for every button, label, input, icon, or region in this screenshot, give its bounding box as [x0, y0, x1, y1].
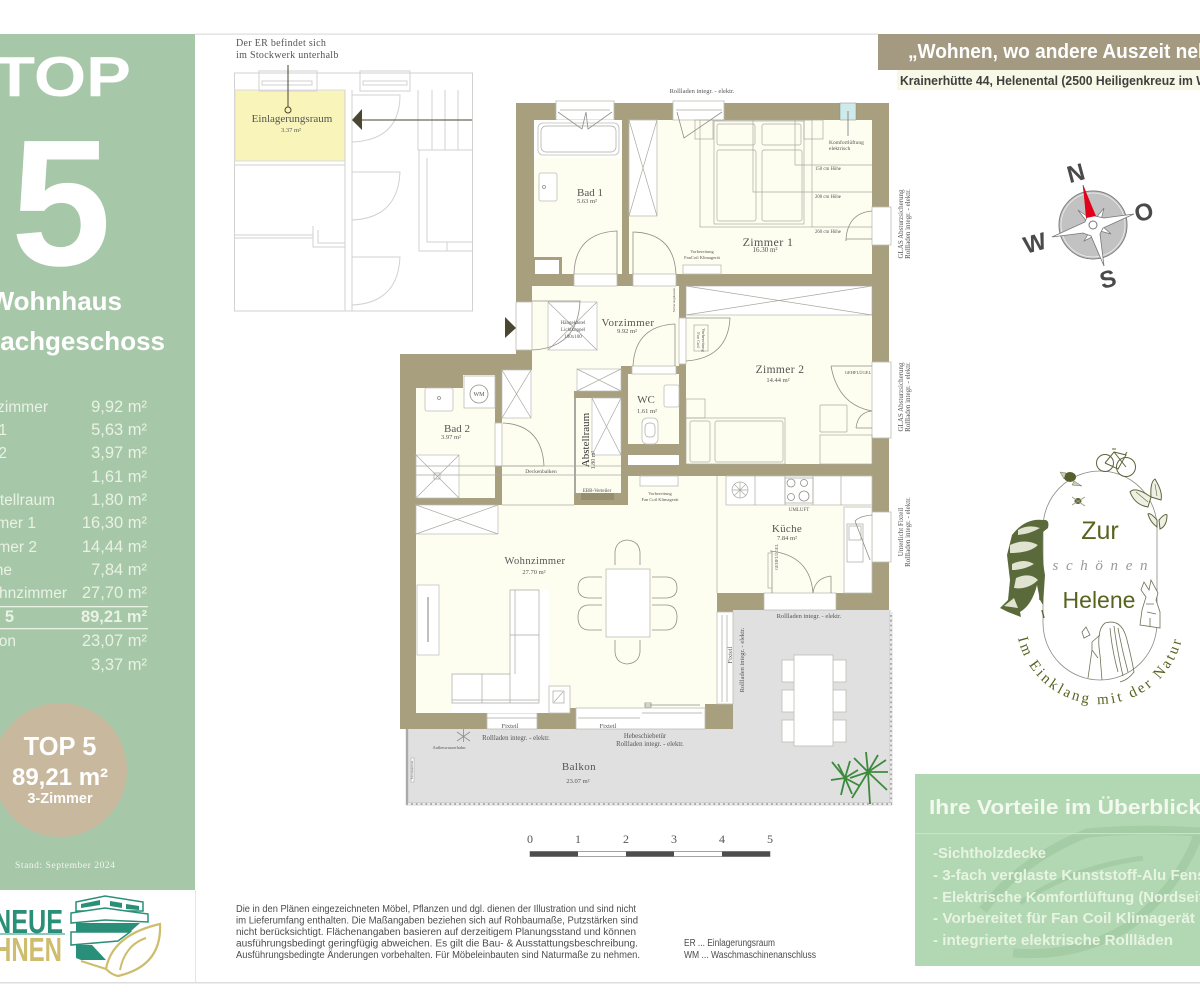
- benefits list: - integrierte elektrische Rollläden: [933, 933, 1173, 949]
- badge: TOP 5 summary circle: [0, 703, 127, 837]
- room interiors: [416, 120, 872, 713]
- room labels: 27.70 m²: [522, 569, 546, 576]
- scale bar: 3: [671, 832, 677, 846]
- room labels: Hebeschiebetür: [624, 733, 667, 740]
- badge: TOP 5 summary circle: 3-Zimmer: [27, 791, 93, 807]
- room labels: elektrisch: [829, 146, 851, 152]
- fan coil box: [640, 476, 678, 486]
- note: ER location: Der ER befindet sich: [236, 38, 326, 49]
- badge: TOP 5 summary circle: TOP 5: [24, 733, 96, 761]
- furniture: Vorzimmer: [502, 301, 675, 418]
- furniture: Bad 1: [534, 112, 622, 274]
- icon: ventilation unit: [840, 103, 856, 136]
- logo: Zur schönen Helene: Im Einklang mit der Natur: [1018, 636, 1181, 706]
- structural lines: [416, 466, 717, 593]
- balcony: Balkon: [562, 761, 596, 773]
- room labels: Vorbereitung: [690, 249, 714, 254]
- room labels: Rollladen integr. - elektr.: [739, 627, 746, 692]
- room labels: Rollladen integr. - elektr.: [777, 613, 842, 620]
- footer disclaimer text: [236, 904, 640, 961]
- footer disclaimer text: Die in den Plänen eingezeichneten Möbel, Pflanzen und dgl. dienen der Illustration und sind nicht: [236, 904, 636, 915]
- benefits list: -Sichtholzdecke: [933, 846, 1046, 862]
- icon: entrance marker: [505, 317, 516, 338]
- room labels: Rollladen integr. - elektr.: [670, 88, 735, 95]
- footer disclaimer text: ausführungsbedingt geringfügig abweichen. Es gilt die Bau- & Ausstattungsbeschreibung.: [236, 938, 638, 950]
- room labels: Wohnzimmer: [505, 556, 566, 567]
- walls: [400, 103, 889, 729]
- scale bar: 2: [623, 832, 629, 846]
- abbreviation legend: WM ... Waschmaschinenanschluss: [684, 950, 816, 961]
- header: slogan bar: [878, 34, 1200, 70]
- panel: storage room plan: [234, 38, 472, 311]
- logo: Zur schönen Helene: Helene: [1063, 587, 1135, 613]
- room area table: 16,30 m²: [82, 514, 147, 532]
- logo: Zur schönen Helene: [1000, 448, 1181, 706]
- room labels: Fan Coil Klimagerät: [642, 497, 679, 502]
- illustration: fox: [1000, 520, 1048, 618]
- room labels: Außenwasserhahn: [432, 745, 466, 750]
- scale bar: 0: [527, 832, 533, 846]
- room labels: 100x100: [564, 335, 582, 340]
- room area table: 89,21 m²: [81, 608, 147, 626]
- room area table: 27,70 m²: [82, 584, 147, 602]
- furniture: Bad 2: WM: [474, 392, 485, 398]
- logo: Zur schönen Helene: schönen: [1052, 558, 1148, 574]
- room: Einlagerungsraum: 3.37 m²: [281, 127, 301, 134]
- heading: big number 5: 5: [11, 103, 111, 304]
- scale bar: [527, 832, 773, 856]
- footer disclaimer text: Ausführungsbedingte Änderungen vorbehalten. Für Möbeleinbauten sind Naturmaße zu nehmen.: [236, 949, 640, 961]
- room area table: 23,07 m²: [82, 632, 147, 650]
- room labels: 14.44 m²: [766, 377, 790, 384]
- room labels: Sicherungskasten: [672, 288, 676, 312]
- illustration: rabbit: [1140, 580, 1160, 628]
- illustration: bees: [1060, 472, 1085, 506]
- scale bar: 4: [719, 832, 725, 846]
- room labels: Abstellraum: [580, 412, 592, 467]
- room area table: 7,84 m²: [91, 561, 148, 579]
- abbreviation legend: ER ... Einlagerungsraum: [684, 938, 775, 949]
- room labels: 9.92 m²: [617, 328, 637, 335]
- panel: left green sidebar: [0, 34, 195, 890]
- icon: compass rose: [1021, 158, 1157, 295]
- illustration: bicycle: [1096, 449, 1136, 476]
- note: ER location: im Stockwerk unterhalb: [236, 50, 339, 61]
- room area table: 1,80 m²: [91, 491, 148, 509]
- date note: Stand: September 2024: [15, 861, 115, 871]
- furniture: Abstellraum: [575, 398, 621, 500]
- footer disclaimer text: nicht berücksichtigt. Flächenangaben basieren auf derzeitigem Planungsstand und können: [236, 927, 636, 938]
- room labels: Fixteil: [502, 723, 519, 730]
- room labels: 3.97 m²: [441, 434, 461, 441]
- room labels: Hängekastel: [561, 321, 586, 326]
- room labels: WC: [637, 394, 655, 406]
- scale bar: 5: [767, 832, 773, 846]
- floor plan: [400, 88, 912, 804]
- room area table: 14,44 m²: [82, 538, 147, 556]
- furniture: Bad 2: [416, 376, 544, 498]
- balcony: 23.07 m²: [566, 778, 590, 785]
- room labels: EBB-Verteiler: [583, 489, 612, 494]
- room: Einlagerungsraum: Einlagerungsraum: [252, 113, 333, 125]
- icon: compass rose: W: [1021, 228, 1050, 260]
- furniture: Zimmer 1: [629, 112, 872, 274]
- panel: benefits overview: [915, 774, 1200, 966]
- room labels: Bad 2: [444, 423, 470, 435]
- room labels: Bad 1: [577, 187, 603, 199]
- furniture: Wohnzimmer: [416, 505, 700, 713]
- room labels: 1.80 m²: [591, 451, 597, 469]
- furniture: Küche: [726, 476, 872, 593]
- room: Einlagerungsraum: [235, 90, 345, 161]
- room labels: GLAS Absturzsicherung: [897, 189, 905, 259]
- room labels: 7.84 m²: [777, 535, 797, 542]
- furniture: WC: [642, 385, 679, 444]
- arrow: ER marker line: [285, 65, 291, 113]
- room labels: 260 cm Höhe: [815, 230, 841, 235]
- room labels: 16.30 m²: [752, 246, 778, 254]
- benefits list: - Vorbereitet für Fan Coil Klimagerät: [933, 911, 1195, 927]
- room labels: Unterlicht Fixteil: [897, 508, 905, 556]
- furniture: balcony table and chairs: [782, 655, 846, 746]
- logo: Zur schönen Helene: Zur: [1081, 517, 1119, 545]
- room labels: [410, 88, 912, 779]
- room area table: [0, 398, 148, 674]
- room labels: Rollladen integr. - elektr.: [616, 741, 684, 748]
- footer disclaimer text: im Lieferumfang enthalten. Die Maßangaben beziehen sich auf Rohbaumaße, Putzstärken sind: [236, 916, 638, 926]
- room area table: 9,92 m²: [91, 398, 148, 416]
- room labels: Vorbereitung: [701, 328, 706, 352]
- room labels: Fan Coil: [696, 332, 701, 349]
- room area table: 3,97 m²: [91, 444, 148, 462]
- room labels: Rollladen integr. - elektr.: [904, 189, 912, 259]
- room labels: Zimmer 1: [743, 235, 793, 249]
- benefits list: [933, 846, 1200, 949]
- room labels: Fixteil: [600, 723, 617, 730]
- room labels: Vorbereitung: [648, 491, 672, 496]
- room labels: GLAS Absturzsicherung: [897, 362, 905, 432]
- room labels: 5.63 m²: [577, 198, 597, 205]
- logo: Neue Wohnen: [0, 896, 160, 976]
- room labels: GEHFLÜGEL: [774, 544, 779, 570]
- abbreviation legend: [684, 938, 816, 961]
- balcony: [407, 610, 891, 804]
- room labels: Rollladen integr. - elektr.: [904, 497, 912, 567]
- room labels: Küche: [772, 523, 802, 535]
- room labels: Komfortlüftung: [829, 139, 864, 146]
- room area table: 3,37 m²: [91, 656, 148, 674]
- room labels: GEHFLÜGEL: [845, 370, 871, 375]
- room labels: Lichtkuppel: [561, 328, 586, 333]
- room labels: 1.61 m²: [637, 408, 657, 415]
- furniture: Zimmer 2: [686, 286, 872, 464]
- room labels: Rollladen integr. - elektr.: [904, 362, 912, 432]
- arrow: entrance: [352, 109, 472, 130]
- room labels: FanCoil Klimagerät: [684, 255, 721, 260]
- badge: TOP 5 summary circle: 89,21 m²: [12, 764, 108, 791]
- room labels: 150 cm Höhe: [815, 167, 841, 172]
- room labels: Vorzimmer: [602, 317, 654, 329]
- scale bar: 1: [575, 832, 581, 846]
- room area table: 5,63 m²: [91, 421, 148, 439]
- room labels: Deckenbalken: [525, 469, 557, 475]
- icon: compass rose: O: [1132, 197, 1157, 228]
- room labels: Terrassenrost: [410, 761, 414, 779]
- room labels: Fixteil: [727, 646, 734, 663]
- icon: palm plant: [831, 752, 888, 804]
- windows and door openings: [487, 101, 891, 729]
- room labels: 200 cm Höhe: [815, 195, 841, 200]
- room area table: 1,61 m²: [91, 468, 148, 486]
- illustration: butterflies: [1130, 479, 1167, 529]
- icon: compass rose: S: [1097, 265, 1119, 295]
- outdoor tap icon: [457, 729, 470, 742]
- room labels: UMLUFT: [789, 508, 809, 513]
- leaf watermark: [983, 830, 1200, 954]
- room labels: Zimmer 2: [756, 364, 804, 376]
- room labels: Rollladen integr. - elektr.: [482, 735, 550, 742]
- illustration: woman with butterfly: [1082, 622, 1134, 682]
- panel heading: Ihre Vorteile im Überblick: [929, 796, 1200, 819]
- icon: compass rose: N: [1064, 158, 1088, 189]
